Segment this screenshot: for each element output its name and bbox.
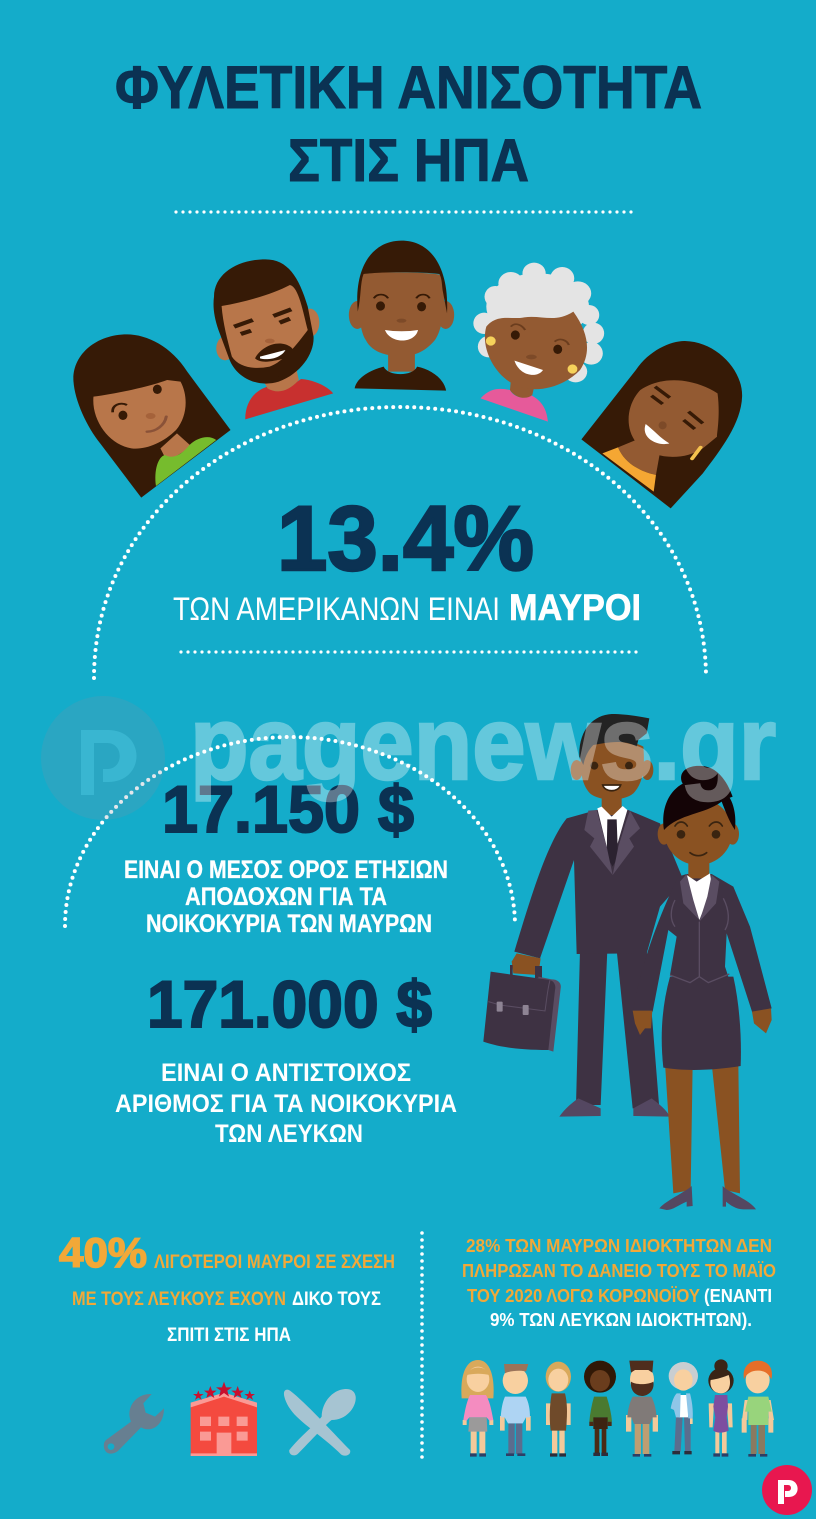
text: white household income: ΕΙΝΑΙ Ο ΑΝΤΙΣΤΟΙΧΟΣ	[161, 1059, 411, 1087]
bottom left text: home ownership: 40%	[59, 1229, 147, 1276]
vertical dotted divider	[420, 1233, 424, 1460]
icon: hotel	[191, 1382, 257, 1456]
person 8	[742, 1361, 774, 1457]
text: black household income	[124, 856, 448, 938]
text: white household income	[115, 1059, 457, 1148]
bottom right text: mortgage default	[462, 1236, 776, 1330]
title: ΦΥΛΕΤΙΚΗ ΑΝΙΣΟΤΗΤΑ	[115, 54, 702, 121]
person 6	[669, 1362, 698, 1454]
briefcase	[483, 953, 561, 1052]
bottom right text: mortgage default: ΠΛΗΡΩΣΑΝ ΤΟ ΔΑΝΕΙΟ ΤΟΥΣ ΤΟ ΜΑΪΟ	[462, 1261, 776, 1281]
bottom right text: mortgage default: 9% ΤΩΝ ΛΕΥΚΩΝ ΙΔΙΟΚΤΗΤΩΝ).	[490, 1310, 752, 1330]
bottom left text: home ownership: ΛΙΓΟΤΕΡΟΙ ΜΑΥΡΟΙ ΣΕ ΣΧΕΣΗ	[154, 1252, 395, 1273]
group of five faces	[73, 241, 742, 508]
face: smiling woman	[581, 341, 742, 508]
watermark: pagenews.gr	[41, 686, 776, 820]
face: woman with long hair	[73, 334, 231, 498]
icon: wrench	[104, 1394, 164, 1454]
row of eight people	[461, 1359, 774, 1457]
text: share of Americans: ΤΩΝ ΑΜΕΡΙΚΑΝΩΝ ΕΙΝΑΙ	[173, 591, 500, 627]
watermark: pagenews.gr: pagenews.gr	[190, 686, 776, 802]
person 4	[584, 1361, 616, 1456]
bottom left icons	[104, 1382, 356, 1456]
person 7	[708, 1359, 734, 1457]
face: grandmother	[473, 263, 604, 422]
person 2	[500, 1364, 531, 1456]
bottom left text: home ownership: ΜΕ ΤΟΥΣ ΛΕΥΚΟΥΣ ΕΧΟΥΝ	[72, 1289, 286, 1310]
bottom left text: home ownership	[59, 1229, 395, 1346]
businesswoman	[633, 766, 772, 1210]
text: black household income: ΝΟΙΚΟΚΥΡΙΑ ΤΩΝ ΜΑΥΡΩΝ	[146, 910, 432, 938]
big dotted arc	[94, 407, 706, 678]
statistic 171.000 dollars: 171.000 $	[147, 967, 432, 1041]
title	[115, 54, 702, 194]
icon: knife and spoon	[284, 1389, 356, 1456]
bottom left text: home ownership: ΣΠΙΤΙ ΣΤΙΣ ΗΠΑ	[167, 1325, 291, 1346]
statistic 13.4%: 13.4%	[277, 488, 534, 590]
person 1	[461, 1360, 494, 1457]
text: white household income: ΤΩΝ ΛΕΥΚΩΝ	[215, 1120, 363, 1148]
businessman	[514, 714, 683, 1117]
person 3	[546, 1362, 571, 1457]
person 5	[626, 1361, 658, 1457]
bottom right text: mortgage default: 28% ΤΩΝ ΜΑΥΡΩΝ ΙΔΙΟΚΤΗΤΩΝ ΔΕΝ	[466, 1236, 772, 1256]
text: share of Americans: ΜΑΥΡΟΙ	[509, 587, 641, 628]
face: bearded man	[214, 259, 333, 419]
bottom left text: home ownership: ΔΙΚΟ ΤΟΥΣ	[292, 1289, 381, 1310]
text: black household income: ΑΠΟΔΟΧΩΝ ΓΙΑ ΤΑ	[185, 883, 387, 911]
text: black household income: ΕΙΝΑΙ Ο ΜΕΣΟΣ ΟΡΟΣ ΕΤΗΣΙΩΝ	[124, 856, 448, 884]
text: white household income: ΑΡΙΘΜΟΣ ΓΙΑ ΤΑ ΝΟΙΚΟΚΥΡΙΑ	[115, 1090, 457, 1118]
statistic 17.150 dollars: 17.150 $	[162, 772, 414, 846]
face: young man	[349, 241, 454, 391]
title: ΣΤΙΣ ΗΠΑ	[288, 127, 529, 194]
business couple illustration	[483, 714, 772, 1210]
bottom right text: mortgage default: ΤΟΥ 2020 ΛΟΓΩ ΚΟΡΩΝΟΪΟΥ	[467, 1286, 700, 1306]
logo: pagenews badge	[762, 1465, 812, 1515]
bottom right text: mortgage default: (ΕΝΑΝΤΙ	[704, 1286, 772, 1306]
second dotted arc	[65, 737, 515, 926]
